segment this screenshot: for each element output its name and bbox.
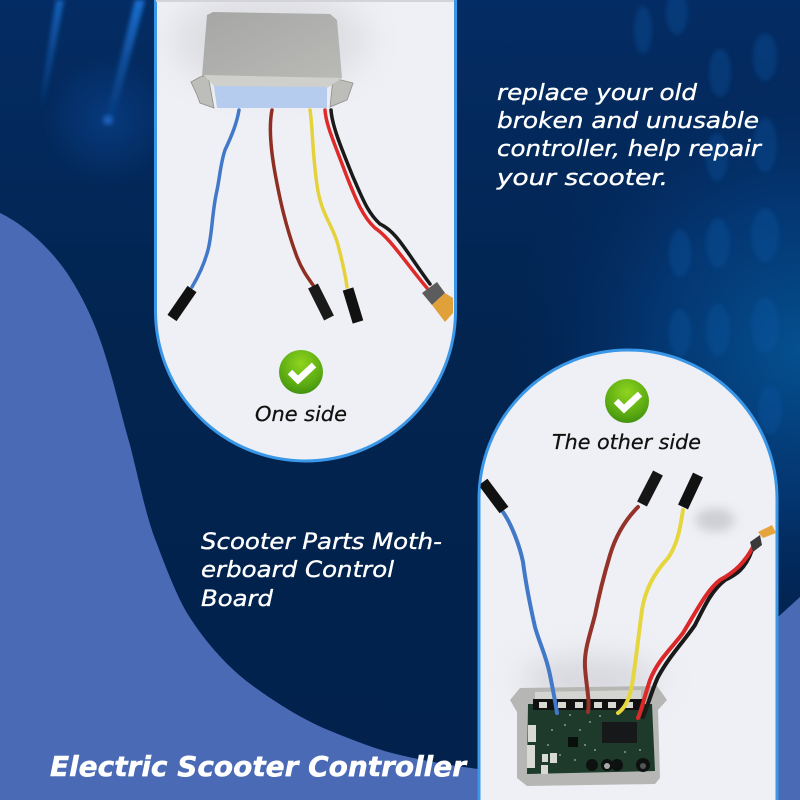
icon: controller housing [191, 12, 353, 108]
text block: product name: Scooter Parts Moth- [201, 530, 442, 555]
text block: replace your controller: replace your old [497, 81, 698, 106]
panel: one side [156, 0, 456, 461]
text block: product name: Board [201, 587, 274, 612]
icon: wires and connectors, one side [172, 110, 453, 322]
text block: product name: erboard Control [201, 558, 394, 583]
text block: replace your controller [496, 81, 763, 191]
text block: product name [201, 530, 442, 612]
text block: replace your controller: controller, help repair [497, 137, 763, 162]
icon: green check, one side [279, 350, 323, 394]
label: the other side: The other side [552, 430, 701, 454]
background: periwinkle wave, left [0, 213, 478, 800]
icon: controller circuit board [510, 686, 667, 786]
text block: replace your controller: broken and unusable [497, 109, 759, 134]
label: one side: One side [255, 402, 347, 426]
title: Electric Scooter Controller [50, 750, 468, 783]
icon: green check, other side [605, 379, 649, 423]
icon: wires and connectors, other side [483, 473, 776, 718]
background: periwinkle wedge, right [778, 597, 800, 800]
text block: replace your controller: your scooter. [496, 166, 668, 191]
panel: the other side [479, 350, 777, 800]
